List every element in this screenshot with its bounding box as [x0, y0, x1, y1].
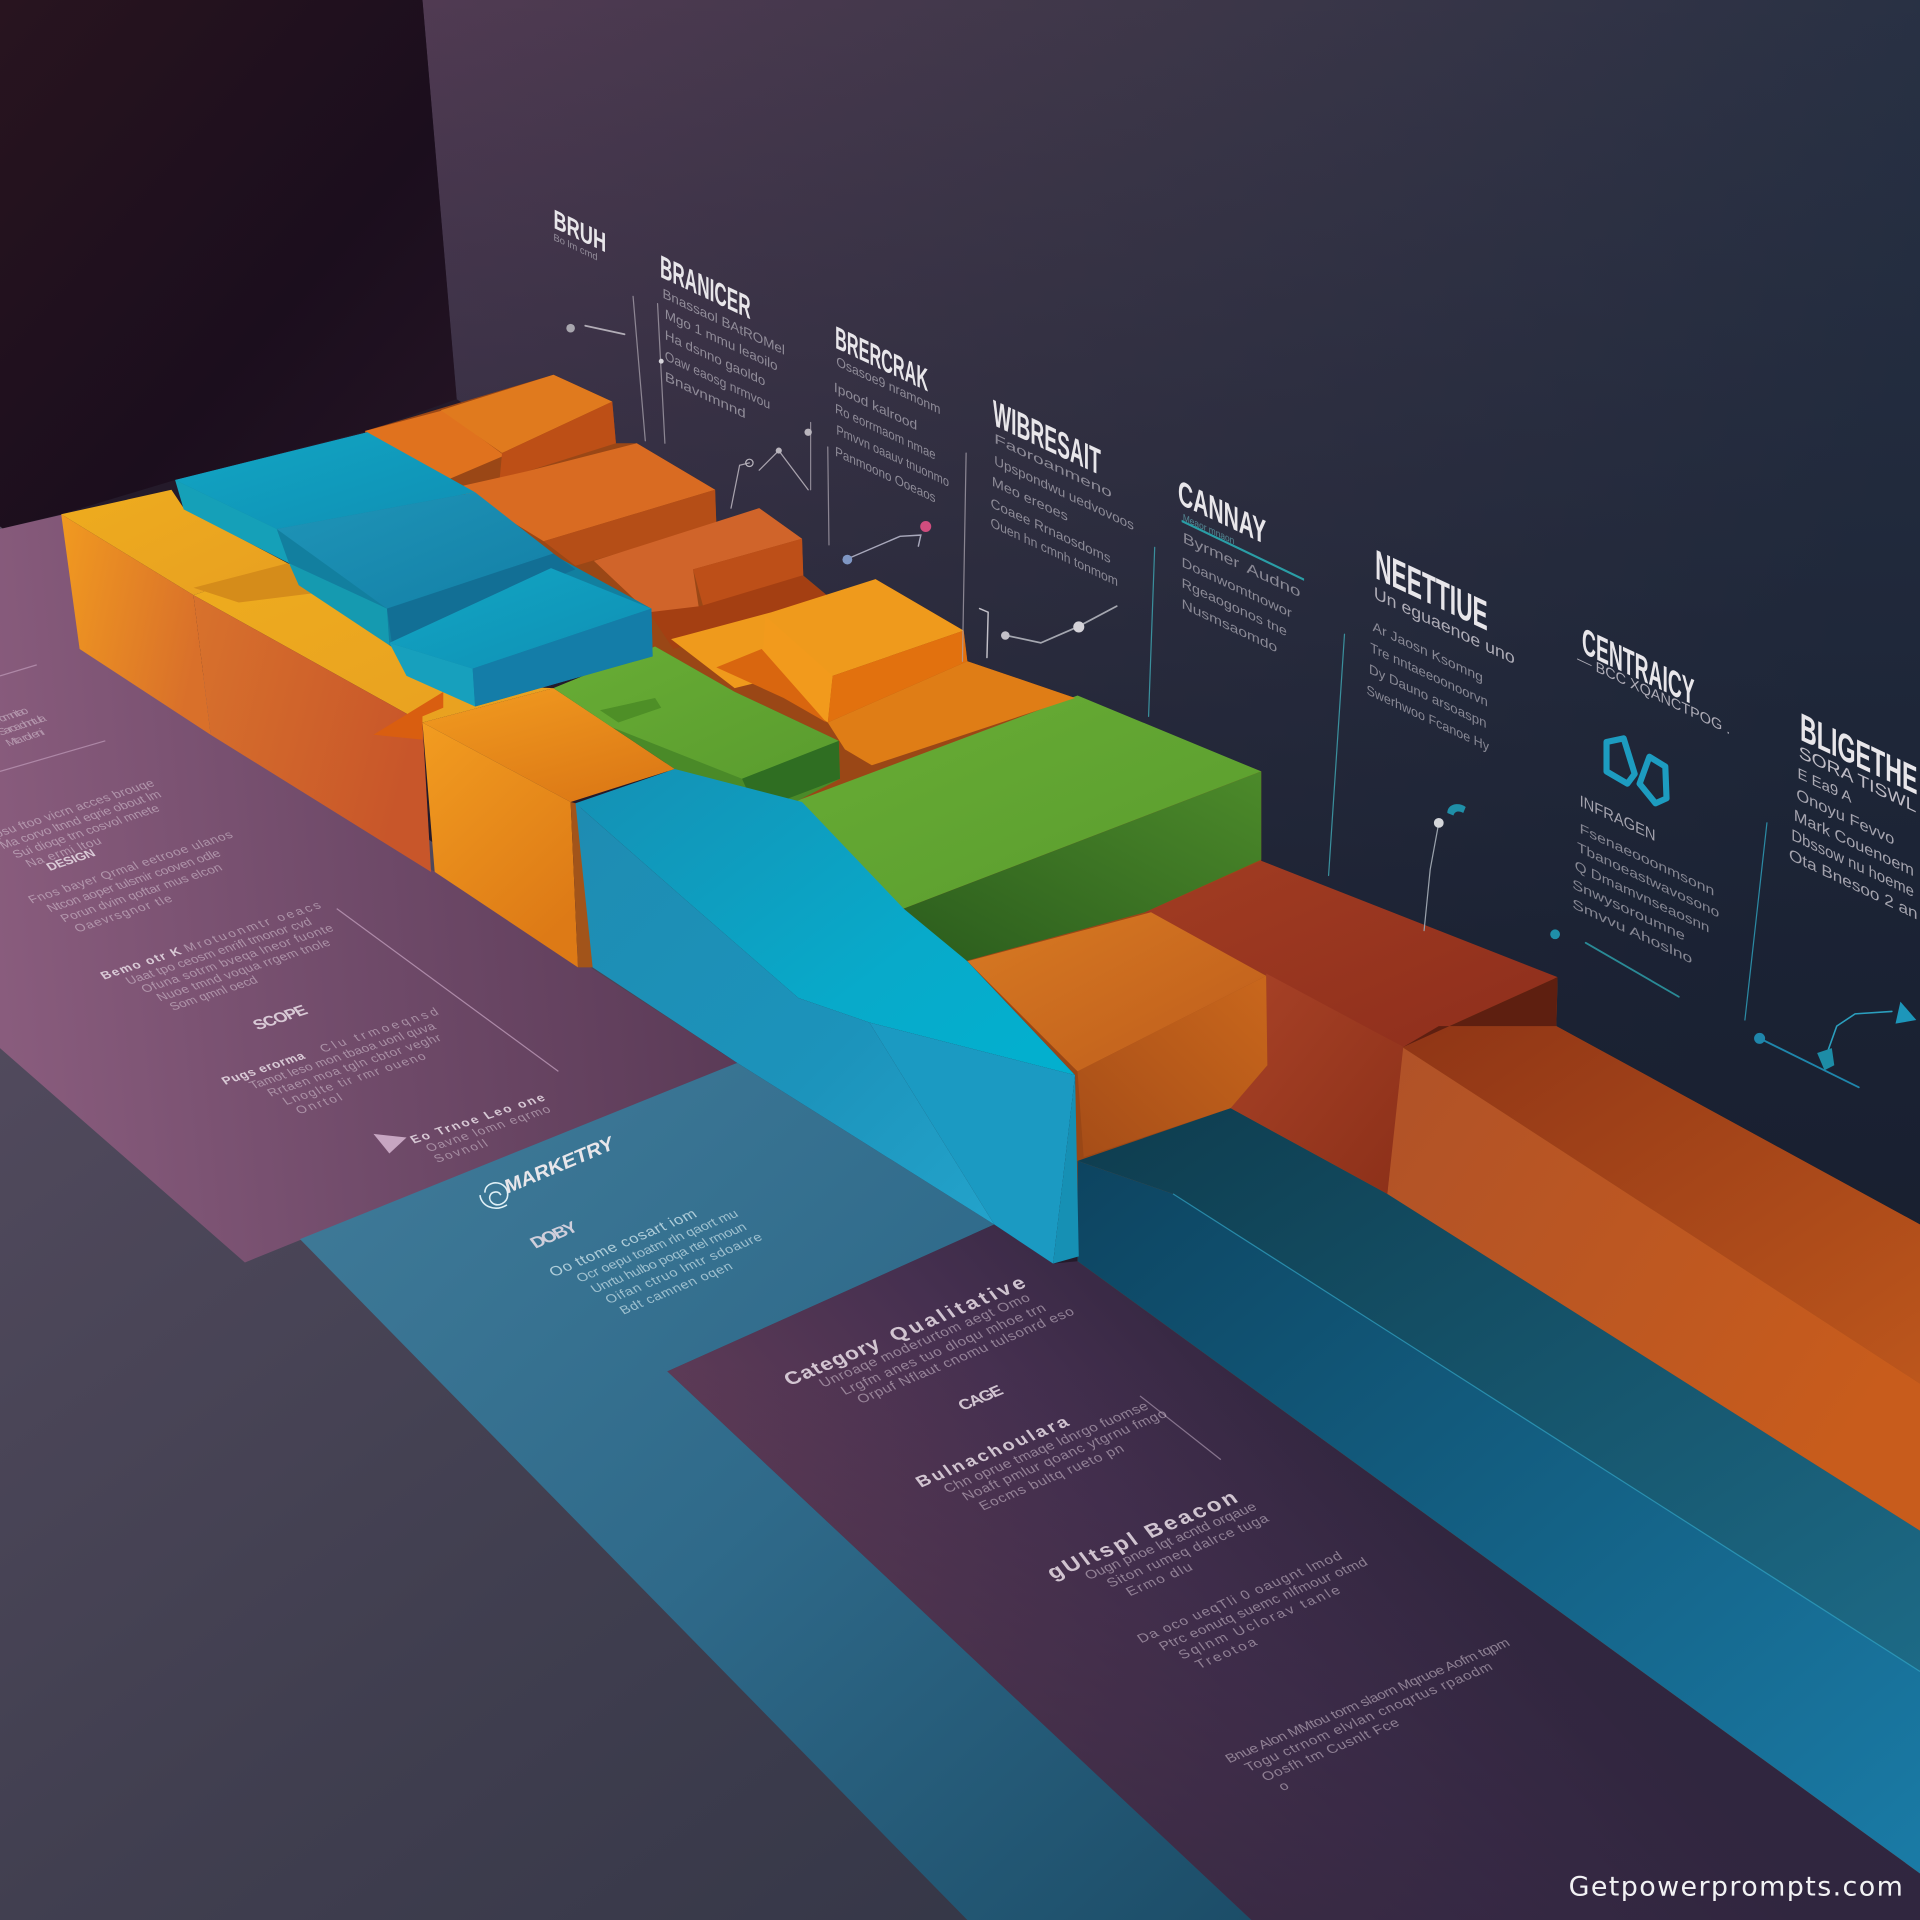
- block: back orange five: [828, 661, 1075, 765]
- panel: teal floor sheet: [300, 1063, 1251, 1920]
- wall block 5: Doanwomtnowor: [1182, 555, 1292, 622]
- wall block 8: SORA TISWL: [1799, 742, 1916, 816]
- wall block 5: Rgeaogonos tne: [1182, 576, 1287, 640]
- wall block 7: — BCC XQANCTPOG .: [1577, 650, 1730, 738]
- text block: purple sheet lines C: Ofuna sotrm bveqa lneor fuonte: [138, 922, 336, 995]
- wall block 6: Dy Dauno arsoaspn: [1369, 662, 1487, 732]
- text block: purple sheet lines C: Som qmnl oecd: [167, 974, 261, 1013]
- panel: dark purple floor sheet: [667, 1224, 1920, 1920]
- wall block 2: Ha dsnno gaoldo: [665, 328, 765, 390]
- wall block 3: Ipood kalrood: [834, 380, 917, 434]
- text block: category qualitative: [780, 1264, 1077, 1425]
- wall block 2: Oaw eaosg nrmvou: [665, 348, 770, 413]
- watermark: Getpowerprompts.com: [1569, 1872, 1903, 1903]
- 3D block: big green: [784, 696, 1261, 961]
- box: left one: [61, 490, 288, 735]
- text block: paragraph four: [1134, 1542, 1390, 1684]
- 3D block: upper blue boxes: [175, 432, 653, 707]
- icon: triangle note: [373, 1134, 407, 1153]
- floor base: [0, 527, 1920, 1920]
- text block: purple sheet scope: Rrtaen moa tgln cbtor veghr: [264, 1032, 444, 1099]
- text block: purple sheet note: Eo Trnoe Leo one: [407, 1091, 548, 1146]
- text block: purple sheet lines C: Mrotuonmtr oeacs: [181, 899, 324, 954]
- wall block 5: [1178, 472, 1304, 669]
- text block: purple sheet lines A: [0, 777, 182, 875]
- text block: paragraph four: Sqlnm Uclorav tanle: [1175, 1583, 1343, 1662]
- text block: purple sheet far left: Mta rol eni: [4, 727, 47, 749]
- text block: purple sheet lines C: Bemo otr K: [98, 945, 184, 982]
- wall block 5: Byrmer: [1183, 530, 1239, 573]
- text block: purple sheet scope: Lnoglte tir rmr oueno: [280, 1050, 429, 1107]
- text block: category qualitative: Unroaqe moderurtom aegt Omo: [816, 1290, 1033, 1390]
- wall block 3: Osasoe9 nramonm: [836, 354, 940, 418]
- 3D block: back orange row: [365, 375, 1075, 765]
- wall block 5: Nusmsaomdo: [1182, 596, 1277, 657]
- wall block 3: Ro eorrmaom nmae: [835, 401, 936, 464]
- wall block 1: BRUH: [553, 204, 606, 259]
- wall block 6: [1367, 537, 1515, 767]
- icon: teal double loop: [1607, 738, 1667, 803]
- wall block 7 body: Tbanoeastwavosono: [1577, 840, 1719, 922]
- 3D block: mid green: [553, 647, 840, 808]
- wall block 7 body: Snwysoroumne: [1572, 877, 1685, 945]
- text block: Doby paragraph: Unrtu hulbo poqa rtel rmoun: [588, 1220, 749, 1296]
- text block: purple sheet scope: SCOPE: [249, 1002, 311, 1033]
- wall block 1: Bo lm cmd: [553, 232, 598, 264]
- text block: paragraph five: Oosfh tm Cusnlt Fce: [1258, 1715, 1402, 1784]
- text block: ultimate beacon: Ermo dlu: [1122, 1560, 1195, 1599]
- wall block 7 body: [1572, 788, 1719, 980]
- heading: Marketry: MARKETRY: [503, 1132, 616, 1199]
- 3D block: large blue wedge: [576, 769, 1079, 1264]
- wall block 4: Meo ereoes: [992, 474, 1068, 525]
- wall block 6: NEETTIUE: [1375, 541, 1488, 640]
- box: blue two: [277, 492, 576, 645]
- text block: purple sheet note: Oavne lomn eqrmo: [423, 1103, 554, 1154]
- wall block 2: BRANICER: [660, 249, 751, 327]
- text block: purple sheet scope: Pugs erorma: [219, 1049, 309, 1087]
- text block: ultimate beacon: Ougn pnoe lqt acntd orqaue: [1081, 1499, 1260, 1582]
- text block: purple sheet scope: [191, 968, 474, 1130]
- block: back orange four: [671, 579, 967, 722]
- box: blue three: [389, 568, 653, 707]
- text block: Doby paragraph: Bdt camnen oqen: [617, 1259, 735, 1317]
- text block: cage section: Bulnachoulara: [912, 1412, 1074, 1491]
- block: back orange three: [594, 508, 833, 649]
- text block: purple sheet far left: [0, 702, 58, 749]
- text block: cage section: CAGE: [954, 1382, 1007, 1414]
- text block: Doby paragraph: DOBY: [526, 1218, 582, 1252]
- wall block 4: WIBRESAIT: [993, 393, 1101, 484]
- text block: purple sheet note: [407, 1091, 564, 1168]
- wall block 7 body: INFRAGEN: [1580, 791, 1656, 845]
- text block: paragraph four: Treotoa: [1192, 1634, 1260, 1671]
- text block: Doby paragraph: Oifan ctruo lmtr sdoaure: [602, 1230, 765, 1306]
- wall block 1: [553, 204, 606, 268]
- underlay: central block mass: [365, 375, 1920, 1873]
- wall block 8: Dbssow nu hoeme: [1791, 825, 1914, 901]
- text block: purple sheet lines B: Fnos bayer Qrmal eetrooe ulanos: [25, 828, 236, 906]
- wall block 4: Ouen hn cmnh tonmom: [991, 515, 1118, 590]
- wall block 7 body: Fsenaeooonmsonn: [1580, 821, 1714, 900]
- back wall: [422, 0, 1920, 1347]
- wall block 6: Tre nntaeeoonoorvn: [1370, 640, 1488, 711]
- text block: paragraph four: Ptrc eonutq suemc nlfmour otmd: [1156, 1554, 1370, 1653]
- text block: cage section: [878, 1335, 1180, 1527]
- wall block 8: E Ea9 A: [1798, 765, 1852, 807]
- text block: purple sheet lines C: [98, 899, 356, 1025]
- text block: ultimate beacon: Siton rumeq dalrce tuga: [1103, 1511, 1272, 1590]
- 3D block: long teal base: [1078, 1108, 1920, 1873]
- text block: purple sheet lines B: Ntcon aoper tulsmir cooven odle: [44, 847, 224, 915]
- box: left three: [422, 688, 675, 967]
- wall block 3: Panmoono Ooeaos: [835, 444, 936, 506]
- wall block 7: CENTRAICY: [1582, 620, 1695, 714]
- chart markers: [566, 324, 1916, 1070]
- text block: purple sheet lines B: DESIGN: [44, 847, 98, 873]
- 3D block: red: [1145, 861, 1558, 1194]
- block: back orange two: [456, 443, 716, 566]
- dark corner wall: [0, 0, 457, 529]
- blue underlay: [175, 432, 653, 707]
- wall block 8: Mark Couenoem: [1794, 806, 1914, 880]
- text block: paragraph five: Togu ctrnom elvlan cnoqrtus rpaodm: [1241, 1659, 1495, 1774]
- text block: purple sheet lines B: Oaevrsgnor tle: [71, 892, 175, 935]
- 3D block: centre orange: [967, 912, 1267, 1157]
- wall block 7 body: Smvvu Ahoslno: [1572, 896, 1692, 968]
- panel: purple floor sheet: [0, 514, 737, 1262]
- icon: spiral logo: [480, 1183, 508, 1208]
- wall block 4: Upspondwu uedvovoos: [994, 453, 1134, 534]
- wall block 4: Coaee Rrnaosdoms: [991, 496, 1111, 567]
- text block: paragraph five: o: [1275, 1778, 1292, 1793]
- wall block 4: [991, 391, 1134, 598]
- text block: purple sheet scope: Clu trmoeqnsd: [317, 1006, 441, 1055]
- text block: Doby paragraph: Oo ttome cosart iom: [546, 1206, 700, 1280]
- wall block 8: Onoyu Fevvo: [1796, 785, 1894, 849]
- wall block 8: Ota Bnesoo 2 an: [1789, 845, 1918, 924]
- wall block 3: [834, 320, 949, 513]
- text block: purple sheet lines B: Porun dvim qoftar mus elcon: [58, 861, 225, 925]
- text block: cage section: Eocms bultq rueto pn: [976, 1441, 1127, 1513]
- box: left two: [193, 563, 553, 872]
- text block: category qualitative: Category: [780, 1334, 885, 1390]
- box: blue one: [175, 432, 475, 563]
- wall block 3: Pmvvn oaauv tnuonmo: [836, 423, 949, 491]
- text block: paragraph five: Bnue Alon MMtou torm slaorn Mqruoe Aofm tqpm: [1222, 1635, 1513, 1766]
- text block: ultimate beacon: [1042, 1481, 1281, 1619]
- text block: purple sheet lines A: Ma corvo ltnnd eqrie obout lm: [0, 788, 164, 851]
- block: back orange one: [365, 375, 616, 480]
- wall block 6: Swerhwoo Fcanoe Hy: [1367, 683, 1490, 756]
- text block: ultimate beacon: gUltspl Beacon: [1042, 1486, 1242, 1583]
- text block: category qualitative: Orpuf Nflaut cnomu tulsonrd eso: [854, 1304, 1077, 1406]
- text block: purple sheet lines C: Uaat tpo ceosm enrifl tmonor cvd: [123, 916, 315, 987]
- text block: cage section: Noaft pmlur qoanc ytgrnu fmgo: [959, 1406, 1170, 1503]
- wall connector lines and mini charts: [585, 296, 1892, 1087]
- wall block 2: Mgo 1 mmu leaoilo: [665, 307, 778, 375]
- wall block 4: Faoroanmeno: [994, 431, 1112, 502]
- wall block 8: [1789, 699, 1918, 924]
- text block: cage section: Chn oprue tmaqe ldnrgo fuomse: [940, 1398, 1151, 1496]
- wall block 7 body: Q Dmamvnseaosnn: [1575, 858, 1709, 937]
- text block: purple sheet lines A: Sui dioqe trn cosvol mnete: [10, 802, 162, 861]
- text block: purple sheet lines A: Na ermi ltou: [23, 835, 104, 870]
- text block: purple sheet scope: Tamot leso mon tbaoa uonl quva: [247, 1020, 438, 1092]
- wall block 6: Un eguaenoe uno: [1374, 583, 1515, 668]
- 3D block: left yellow orange boxes: [61, 490, 675, 967]
- text block: category qualitative: Lrgfm anes tuo dloqu mhoe trn: [837, 1300, 1049, 1397]
- text block: Doby paragraph: Ocr oepu toatm rln qaort mu: [573, 1207, 741, 1285]
- 3D block: long orange: [1387, 1026, 1920, 1531]
- wall block 5: CANNAY: [1178, 472, 1266, 552]
- wall block 2: [660, 249, 785, 441]
- wall block 5: Audno: [1247, 560, 1300, 601]
- text block: purple sheet note: Sovnoll: [431, 1137, 491, 1165]
- text block: category qualitative: Qualitative: [885, 1273, 1030, 1346]
- wall block 3: BRERCRAK: [835, 320, 928, 399]
- wall block 2: Bnavnmnnd: [665, 369, 746, 422]
- text block: Doby paragraph: [524, 1161, 775, 1330]
- wall block 6: Ar Jaosn Ksomng: [1373, 619, 1483, 686]
- text block: purple sheet lines B: [9, 807, 262, 941]
- wall block 2: Bnassaol BAtROMel: [662, 286, 785, 359]
- wall block 5: Meaor mnaon: [1183, 513, 1234, 547]
- text block: purple sheet scope: Onrtol: [293, 1091, 345, 1117]
- text block: purple sheet lines C: Nuoe tmnd voqua rrgem tnole: [154, 936, 333, 1004]
- text block: paragraph four: Da oco ueqTli 0 oaugnt lmod: [1134, 1548, 1345, 1646]
